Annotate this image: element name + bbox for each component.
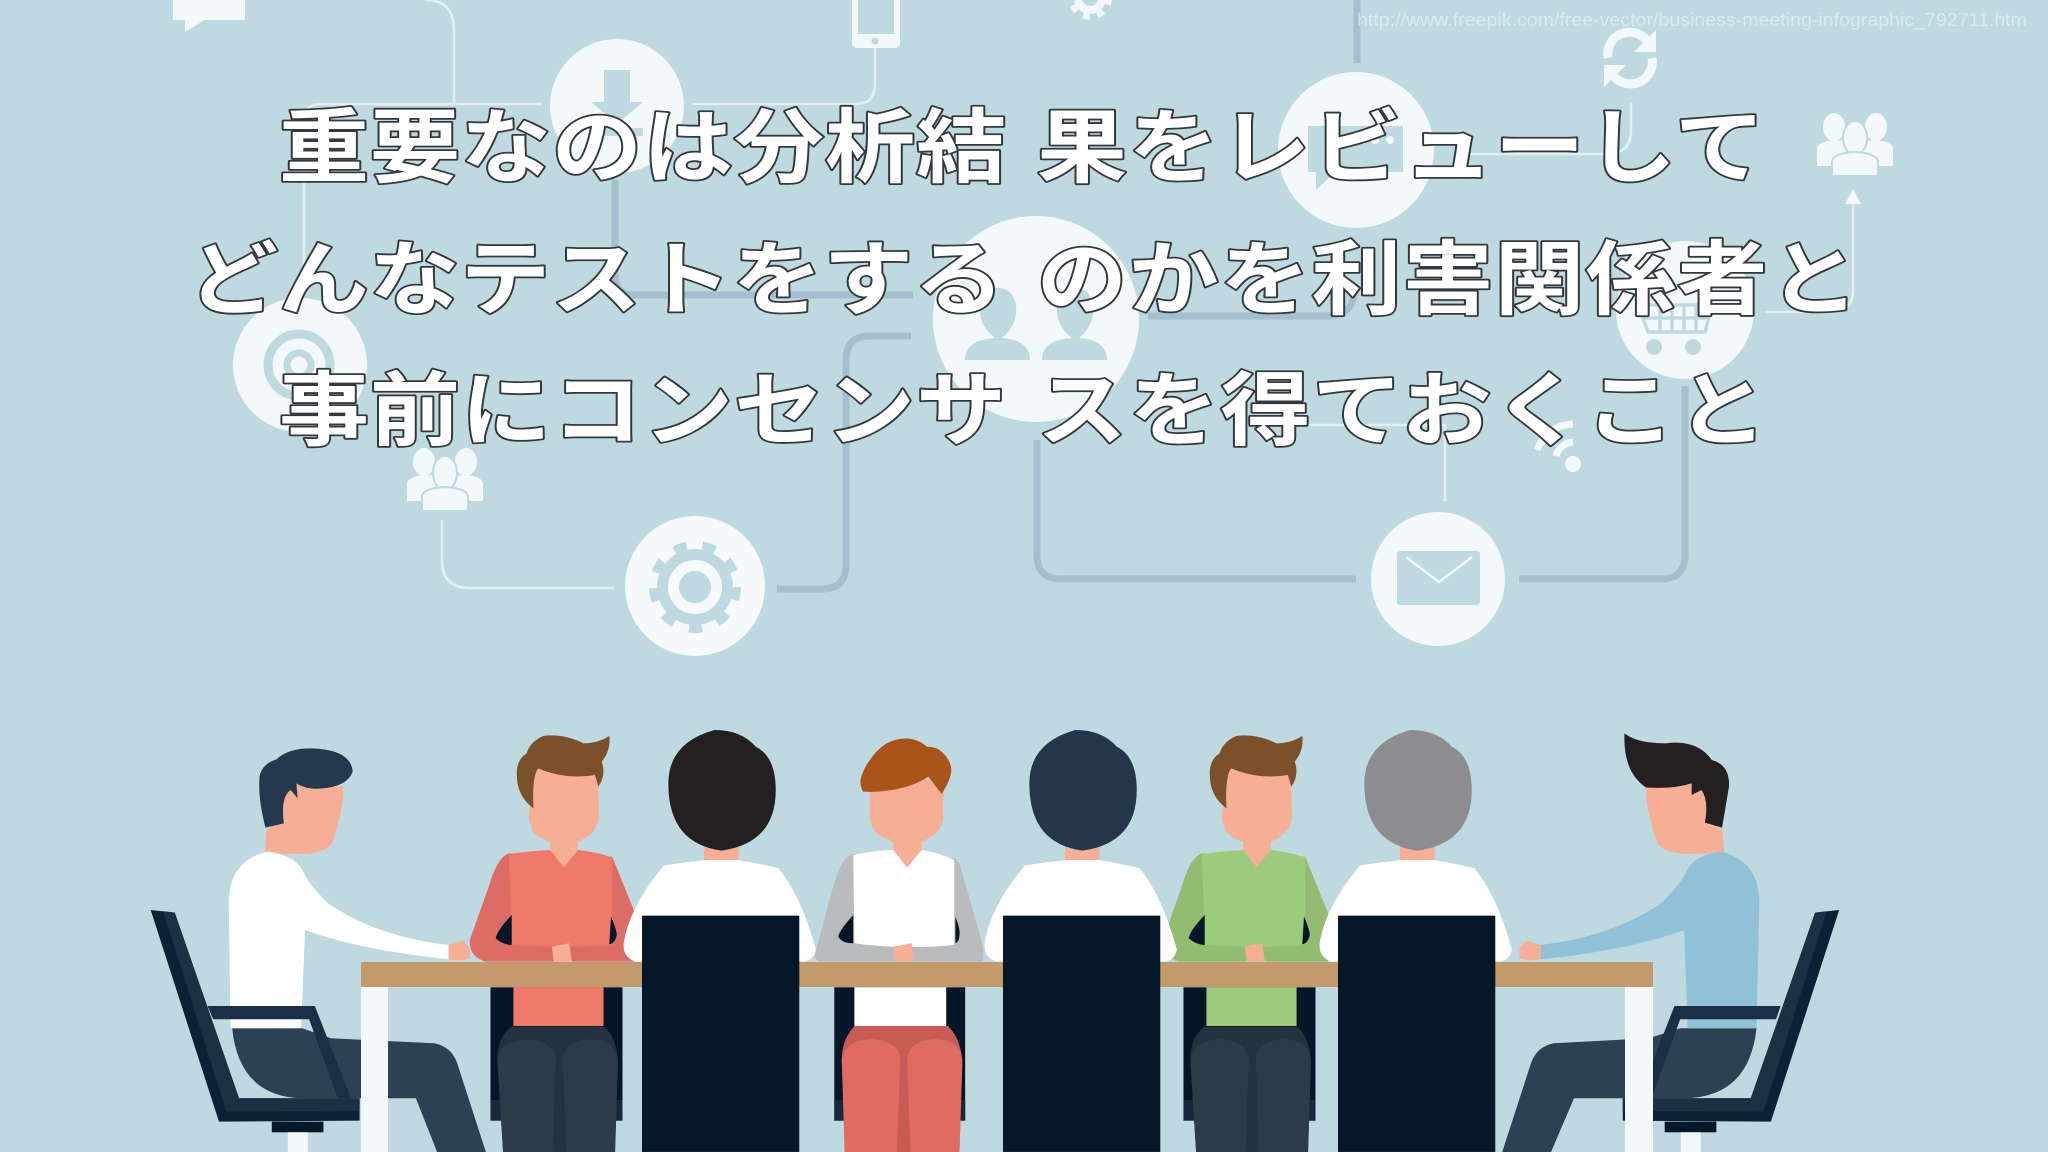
title line 1: 重要なのは分析結 bbox=[279, 103, 1006, 194]
table leg right bbox=[1625, 987, 1653, 1152]
person: left side man bbox=[207, 748, 486, 1152]
icon: chat circle bbox=[1278, 72, 1434, 228]
source URL: http://www.freepik.com/free-vector/business-meeting-infographic_792711.htm bbox=[1357, 10, 2027, 31]
person: woman bbox=[814, 738, 983, 1152]
table top bbox=[361, 962, 1653, 987]
icon: small gear top bbox=[1071, 0, 1109, 17]
thin connector lines bbox=[304, 0, 1853, 588]
arrow: up to people bbox=[1845, 189, 1861, 204]
title line 2 bbox=[188, 235, 1859, 326]
network diagram bbox=[173, 0, 1893, 656]
person: back view dark hair with chair bbox=[624, 730, 816, 1152]
icon: cart circle bbox=[1616, 241, 1754, 379]
title line 1 bbox=[279, 103, 1765, 194]
meeting scene bbox=[151, 730, 1839, 1152]
title line 3: 事前にコンセンサ bbox=[279, 366, 1006, 457]
person: right side man bbox=[1502, 733, 1781, 1152]
side chair and person right bbox=[1502, 733, 1839, 1152]
person: man in green bbox=[1163, 735, 1328, 1152]
icon: gear circle bbox=[625, 516, 765, 656]
title line 3 bbox=[279, 366, 1767, 457]
title bbox=[188, 103, 1859, 457]
table leg left bbox=[361, 987, 388, 1152]
icon: people left bbox=[407, 448, 483, 511]
icon: people right bbox=[1817, 113, 1893, 176]
right chair bbox=[1623, 910, 1839, 1152]
person: back view navy hair with chair bbox=[985, 730, 1177, 1152]
person: back view grey hair with chair bbox=[1320, 730, 1512, 1152]
title line 2: のかを利害関係者と bbox=[1037, 235, 1859, 326]
icon: chat bubble top left bbox=[173, 0, 245, 32]
icon: sync arrows bbox=[1604, 30, 1656, 87]
side chair left bbox=[151, 910, 360, 1152]
title line 2: どんなテストをする bbox=[188, 235, 1004, 326]
thick connector lines bbox=[615, 0, 1685, 589]
icon: wifi bbox=[1537, 424, 1581, 472]
title line 3: スを得ておくこと bbox=[1037, 366, 1767, 457]
icon: phone bbox=[852, 0, 900, 48]
icon: envelope circle bbox=[1371, 512, 1505, 646]
icon: at sign circle bbox=[233, 298, 367, 432]
icon: central people circle bbox=[933, 216, 1139, 422]
icon: download circle bbox=[550, 39, 684, 173]
title line 1: 果をレビューして bbox=[1037, 103, 1765, 194]
person: man in red bbox=[470, 735, 635, 1152]
